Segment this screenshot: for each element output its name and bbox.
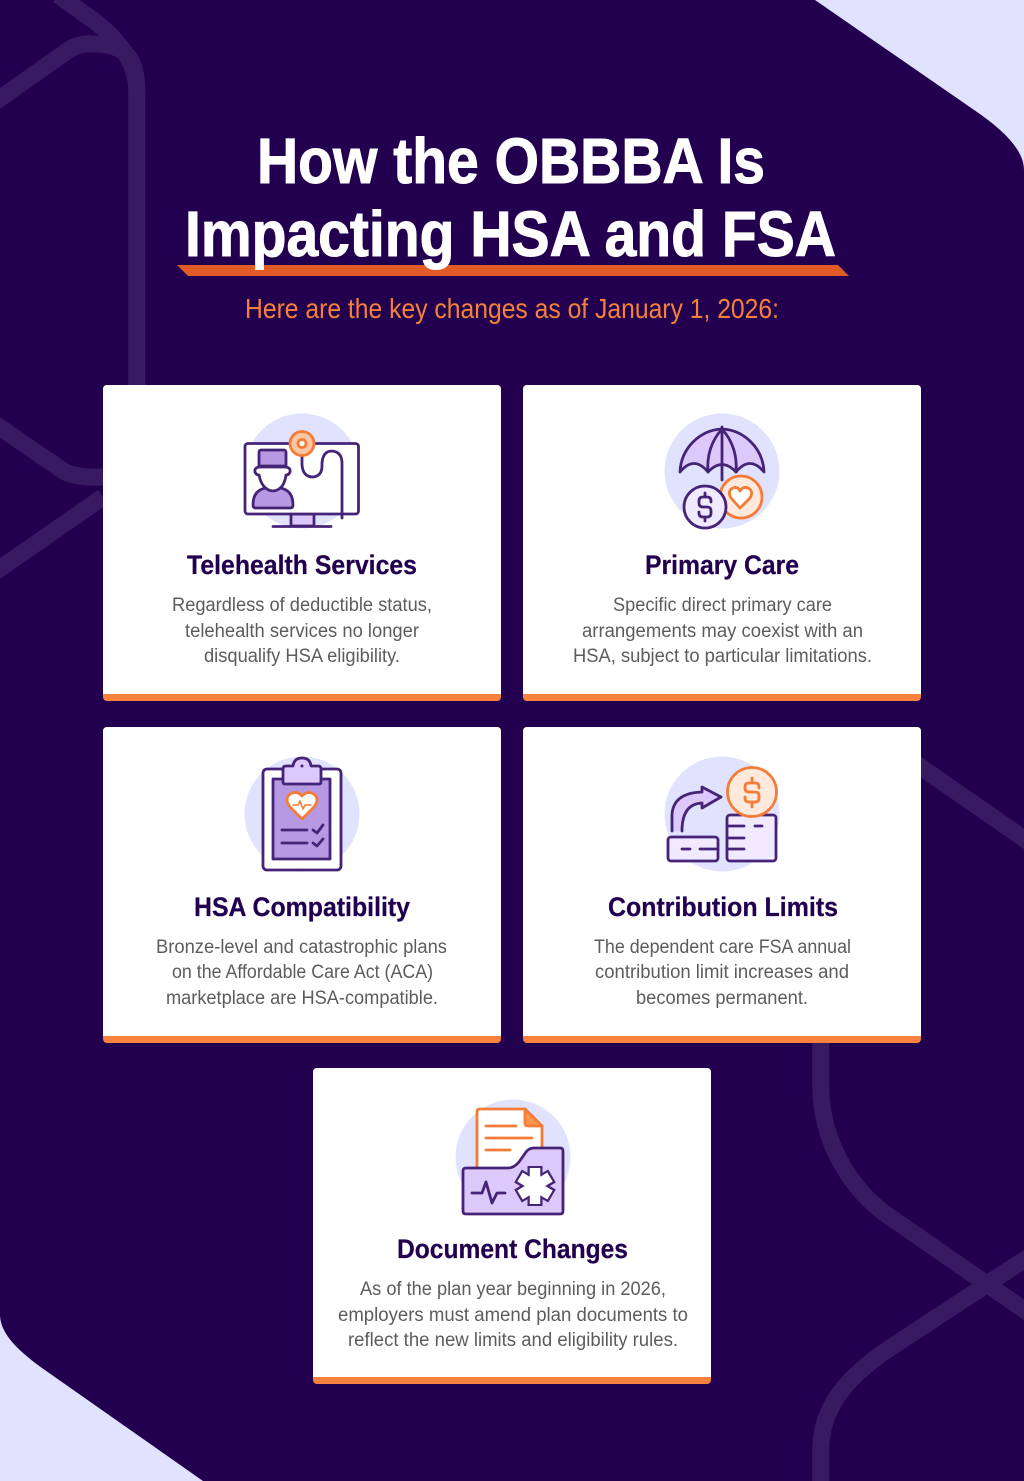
card heading: Document Changes bbox=[397, 1234, 628, 1264]
card text bbox=[594, 937, 851, 1009]
card text: becomes permanent. bbox=[636, 988, 808, 1009]
card text: Specific direct primary care bbox=[613, 595, 832, 616]
icon: coin and arrow bbox=[664, 756, 780, 872]
panel: contribution limits bbox=[523, 727, 921, 1043]
corner: bottom left bbox=[0, 1316, 203, 1481]
title: Impacting HSA and FSA bbox=[185, 198, 836, 270]
card heading: Contribution Limits bbox=[608, 892, 838, 922]
card text: on the Affordable Care Act (ACA) bbox=[172, 962, 433, 983]
card text: contribution limit increases and bbox=[595, 962, 849, 983]
card text: employers must amend plan documents to bbox=[338, 1305, 688, 1326]
card text: arrangements may coexist with an bbox=[582, 621, 863, 642]
panel: telehealth services bbox=[103, 385, 501, 701]
panel: document changes bbox=[313, 1068, 711, 1384]
card text: Regardless of deductible status, bbox=[172, 595, 432, 616]
card text: HSA, subject to particular limitations. bbox=[573, 646, 872, 667]
card heading: Telehealth Services bbox=[187, 550, 417, 580]
card text: As of the plan year beginning in 2026, bbox=[360, 1279, 666, 1300]
card text: disqualify HSA eligibility. bbox=[204, 646, 400, 667]
icon: umbrella and coins bbox=[664, 414, 780, 528]
card text: reflect the new limits and eligibility rules. bbox=[348, 1330, 678, 1351]
card text: telehealth services no longer bbox=[185, 621, 420, 642]
subtitle: Here are the key changes as of January 1, 2026: bbox=[245, 293, 779, 324]
card text: Bronze-level and catastrophic plans bbox=[156, 937, 447, 958]
card heading: Primary Care bbox=[645, 550, 799, 580]
card text: marketplace are HSA-compatible. bbox=[166, 988, 438, 1009]
panel: HSA compatibility bbox=[103, 727, 501, 1043]
card text bbox=[172, 595, 432, 667]
card text bbox=[156, 937, 447, 1009]
icon: clipboard bbox=[244, 756, 360, 872]
title: How the OBBBA Is bbox=[257, 125, 765, 197]
card text bbox=[573, 595, 872, 667]
card text bbox=[338, 1279, 688, 1351]
title bbox=[177, 125, 849, 276]
title underline bbox=[177, 265, 849, 276]
panel: primary care bbox=[523, 385, 921, 701]
card text: The dependent care FSA annual bbox=[594, 937, 851, 958]
card heading: HSA Compatibility bbox=[194, 892, 410, 922]
icon: document folder bbox=[456, 1100, 570, 1214]
icon: telehealth monitor bbox=[244, 414, 360, 528]
corner: top right bbox=[815, 0, 1024, 170]
